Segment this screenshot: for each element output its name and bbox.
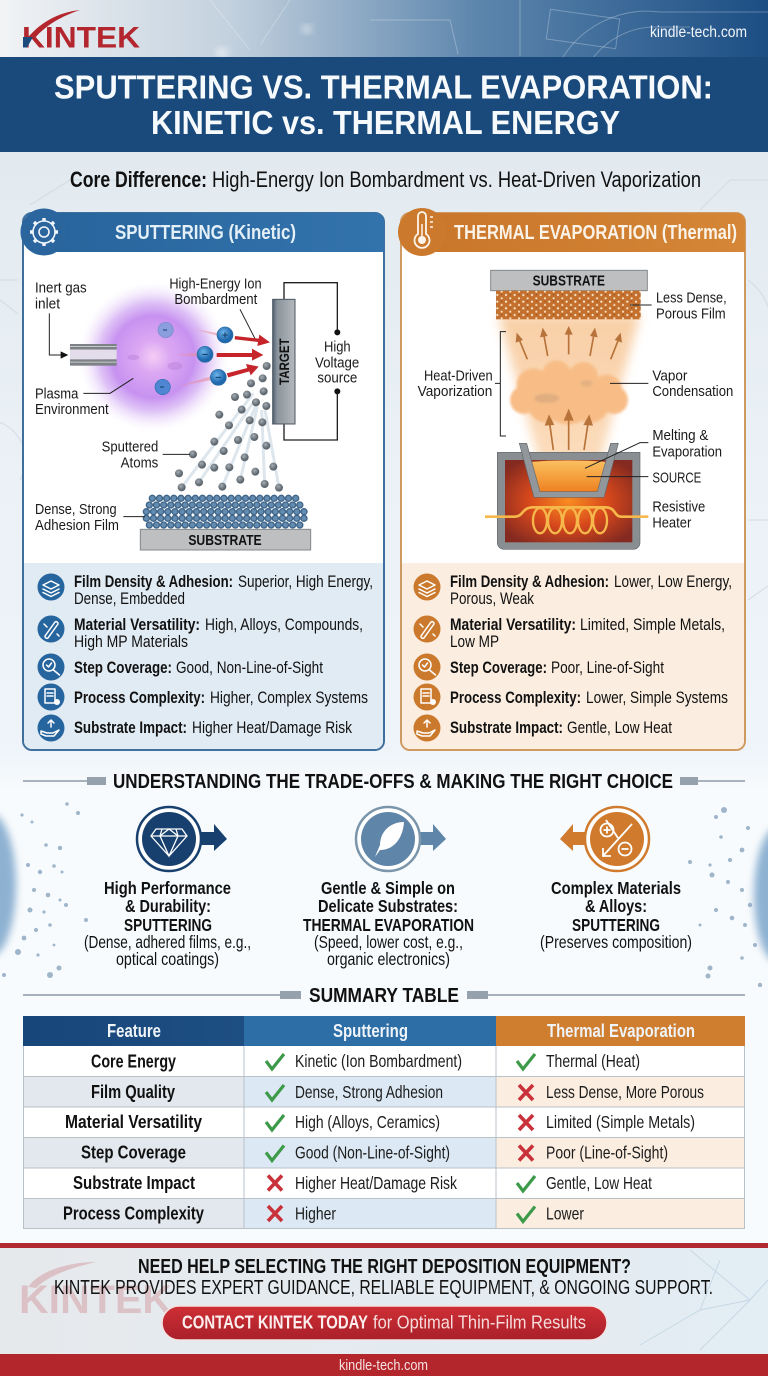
- row: substrate impact: [73, 1172, 652, 1193]
- row: film quality: Less Dense, More Porous: [546, 1082, 704, 1102]
- panel heading: sputtering: SPUTTERING (Kinetic): [115, 222, 296, 244]
- bracket and label: heat-driven vaporization: [418, 332, 506, 436]
- title band: KINETIC vs. THERMAL ENERGY: [151, 104, 620, 141]
- icon: gear: [20, 208, 68, 256]
- title band: [0, 57, 768, 152]
- target: TARGET: [276, 338, 292, 385]
- contact button: [162, 1306, 607, 1340]
- icon: feather with arrow: [356, 807, 446, 871]
- row: step coverage: Step Coverage:: [74, 659, 172, 677]
- label: sputtered atoms: Sputtered: [102, 440, 158, 456]
- dense film: [146, 498, 305, 525]
- substrate: SUBSTRATE: [188, 533, 262, 549]
- vapor cloud: [510, 360, 628, 424]
- power circuit: [284, 283, 340, 440]
- section heading: summary table: SUMMARY TABLE: [309, 984, 459, 1007]
- inlet arrow: [49, 313, 68, 359]
- vapor haze: [498, 315, 640, 463]
- choice: high performance: High Performance: [104, 878, 231, 898]
- row: step coverage: Poor, Line-of-Sight: [551, 659, 664, 677]
- contact button: CONTACT KINTEK TODAY: [182, 1312, 369, 1332]
- choice: gentle and simple: THERMAL EVAPORATION: [303, 915, 474, 935]
- choice: gentle and simple: [303, 807, 474, 969]
- row: process complexity: Lower, Simple Systems: [586, 689, 728, 707]
- row: core energy: Core Energy: [91, 1050, 177, 1072]
- choice: complex materials: SPUTTERING: [572, 915, 660, 935]
- row: material versatility: Limited (Simple Metals): [546, 1112, 695, 1132]
- row: film quality: [91, 1081, 704, 1102]
- resistive heater coil: [485, 507, 648, 533]
- logo: KINTEK: [22, 10, 140, 54]
- row: material versatility: High, Alloys, Compounds,: [205, 616, 363, 634]
- choice: complex materials: (Preserves composition): [540, 932, 692, 952]
- row: substrate impact: Substrate Impact:: [74, 719, 187, 737]
- label: high voltage source: Voltage: [315, 355, 359, 371]
- website link top: kindle-tech.com: [650, 24, 747, 41]
- row: film quality: Film Quality: [91, 1081, 176, 1102]
- call to action band: NEED HELP SELECTING THE RIGHT DEPOSITION EQUIPMENT?: [138, 1256, 631, 1278]
- row: material versatility: High (Alloys, Ceramics): [295, 1112, 440, 1132]
- row: process complexity: Higher: [295, 1204, 336, 1224]
- row: process complexity: [63, 1202, 584, 1224]
- table header: Feature: [107, 1021, 161, 1041]
- row: film density: Film Density & Adhesion:: [74, 573, 233, 591]
- panel: thermal evaporation: [398, 208, 745, 750]
- row: process complexity: Process Complexity:: [450, 689, 581, 707]
- label: sputtered atoms: [102, 440, 190, 471]
- label: high-energy ion bombardment: Bombardment: [174, 292, 257, 308]
- row: substrate impact: Substrate Impact:: [450, 719, 563, 737]
- row: film quality: Dense, Strong Adhesion: [295, 1082, 443, 1102]
- sputtered atoms: [175, 362, 283, 492]
- row: substrate impact: Gentle, Low Heat: [567, 719, 672, 737]
- row: process complexity: Process Complexity: [63, 1202, 205, 1224]
- row: film density: Dense, Embedded: [74, 590, 185, 608]
- label: source: SOURCE: [652, 470, 701, 486]
- bracket and label: heat-driven vaporization: Heat-Driven: [424, 369, 493, 385]
- icon: thermometer: [398, 208, 446, 256]
- decorative blue mist left: [0, 802, 88, 978]
- footer bar: kindle-tech.com: [339, 1357, 428, 1374]
- label: high voltage source: High: [324, 340, 351, 356]
- row: material versatility: Low MP: [450, 633, 499, 651]
- row: substrate impact: Gentle, Low Heat: [546, 1173, 652, 1193]
- row: step coverage: Step Coverage: [81, 1142, 186, 1162]
- upper vapor arrows: [516, 326, 622, 359]
- bracket and label: heat-driven vaporization: Vaporization: [418, 384, 492, 400]
- label: high voltage source: [315, 340, 359, 387]
- choice: gentle and simple: (Speed, lower cost, e.g.,: [314, 932, 463, 952]
- ions: [155, 322, 233, 395]
- label: less dense porous film: Less Dense,: [656, 291, 727, 307]
- sputtered atom trails: [182, 393, 279, 488]
- title band: SPUTTERING VS. THERMAL EVAPORATION:: [54, 68, 713, 106]
- label: high-energy ion bombardment: High-Energy Ion: [169, 276, 262, 292]
- crucible: [519, 443, 618, 497]
- row: step coverage: Poor (Line-of-Sight): [546, 1142, 668, 1162]
- choice: gentle and simple: organic electronics): [327, 949, 450, 969]
- label: source: [587, 470, 701, 486]
- section heading: trade-offs: UNDERSTANDING THE TRADE-OFFS & MAKING THE RIGHT CHOICE: [113, 770, 673, 793]
- label: plasma environment: Plasma: [35, 386, 79, 402]
- label: melting and evaporation: [585, 428, 722, 468]
- row: material versatility: Material Versatility:: [74, 616, 200, 634]
- summary table: [23, 1016, 745, 1229]
- label: melting and evaporation: Melting &: [652, 428, 709, 444]
- substrate: [491, 270, 647, 291]
- target: [273, 299, 295, 424]
- choice: gentle and simple: Delicate Substrates:: [318, 896, 458, 916]
- row: material versatility: High MP Materials: [74, 633, 188, 651]
- table header: [23, 1016, 745, 1046]
- row: step coverage: [38, 654, 323, 680]
- row: film density: [414, 573, 732, 608]
- footer bar: [0, 1354, 768, 1376]
- row: step coverage: [414, 654, 664, 680]
- row: process complexity: Higher, Complex Systems: [210, 689, 368, 707]
- heater body: [497, 452, 640, 549]
- molten source: [528, 460, 608, 492]
- choice: high performance: SPUTTERING: [124, 915, 212, 935]
- call to action band: [0, 1243, 768, 1354]
- plasma cloud: [78, 282, 228, 432]
- label: sputtered atoms: Atoms: [121, 455, 158, 471]
- label: less dense porous film: [630, 291, 727, 322]
- label: inert gas inlet: [35, 281, 87, 312]
- choice: high performance: [84, 807, 251, 969]
- diagram: thermal evaporation process: [418, 270, 733, 549]
- label: high voltage source: source: [317, 371, 357, 387]
- table shading: [23, 1046, 745, 1229]
- choice: complex materials: & Alloys:: [585, 896, 647, 916]
- row: substrate impact: Higher Heat/Damage Risk: [192, 719, 353, 737]
- lower vapor arrows: [545, 409, 593, 450]
- ion trails and red arrows: [177, 329, 270, 386]
- row: step coverage: Good, Non-Line-of-Sight: [176, 659, 323, 677]
- choice: high performance: & Durability:: [125, 896, 211, 916]
- comparison list: thermal evaporation: [414, 573, 732, 742]
- table header: Sputtering: [333, 1021, 408, 1041]
- choice: complex materials: [540, 807, 692, 952]
- comparison list: sputtering: [38, 573, 373, 742]
- icon: plus minus with arrow: [560, 807, 649, 871]
- row: material versatility: [38, 616, 363, 651]
- row: step coverage: [81, 1142, 668, 1162]
- row: process complexity: Process Complexity:: [74, 689, 205, 707]
- row: substrate impact: Higher Heat/Damage Risk: [295, 1173, 457, 1193]
- label: plasma environment: [35, 378, 133, 418]
- top header strip: [0, 0, 768, 62]
- label: inert gas inlet: inlet: [35, 296, 60, 312]
- diagram: sputtering process: [35, 276, 359, 550]
- label: dense strong adhesion film: Dense, Strong: [35, 502, 117, 518]
- label: plasma environment: Environment: [35, 402, 109, 418]
- row: core energy: Thermal (Heat): [546, 1051, 640, 1071]
- porous film: [496, 291, 641, 319]
- row: core energy: Kinetic (Ion Bombardment): [295, 1051, 462, 1071]
- row: material versatility: Material Versatility: [65, 1111, 203, 1132]
- row: film density: Film Density & Adhesion:: [450, 573, 609, 591]
- logo: KINTEK: KINTEK: [22, 22, 140, 54]
- row: film density: [38, 573, 373, 608]
- label: resistive heater: Heater: [652, 515, 691, 531]
- table header: Thermal Evaporation: [547, 1021, 695, 1041]
- row: substrate impact: [38, 714, 353, 742]
- watermark logo: KINTEK: [19, 1278, 172, 1322]
- row: film density: Superior, High Energy,: [238, 573, 373, 591]
- substrate: SUBSTRATE: [533, 274, 605, 290]
- choice: high performance: optical coatings): [116, 949, 219, 969]
- row: process complexity: Lower: [546, 1204, 584, 1224]
- substrate: [140, 529, 311, 550]
- choice: high performance: (Dense, adhered films, e.g.,: [84, 932, 251, 952]
- choice: complex materials: Complex Materials: [551, 878, 681, 898]
- row: material versatility: Limited, Simple Metals,: [580, 616, 725, 634]
- core difference line: Core Difference:: [70, 167, 207, 192]
- row: core energy: [91, 1050, 640, 1072]
- row: process complexity: [414, 684, 728, 710]
- row: substrate impact: [414, 714, 672, 742]
- label: high-energy ion bombardment: [169, 276, 262, 339]
- label: dense strong adhesion film: [35, 502, 145, 534]
- label: resistive heater: Resistive: [652, 500, 705, 516]
- label: dense strong adhesion film: Adhesion Film: [35, 518, 119, 534]
- label: inert gas inlet: Inert gas: [35, 281, 87, 297]
- row: film density: Porous, Weak: [450, 590, 535, 608]
- gas inlet pipe: [70, 344, 117, 366]
- label: less dense porous film: Porous Film: [656, 306, 726, 322]
- contact button: for Optimal Thin-Film Results: [373, 1312, 586, 1332]
- row: material versatility: [414, 616, 725, 651]
- label: vapor condensation: [610, 369, 733, 400]
- row: film density: Lower, Low Energy,: [614, 573, 732, 591]
- section heading: summary table: [23, 984, 745, 1007]
- label: vapor condensation: Condensation: [652, 384, 733, 400]
- decorative blue mist right: [688, 807, 768, 987]
- label: vapor condensation: Vapor: [652, 369, 687, 385]
- choice: gentle and simple: Gentle & Simple on: [321, 878, 455, 898]
- row: material versatility: Material Versatility:: [450, 616, 576, 634]
- row: step coverage: Step Coverage:: [450, 659, 547, 677]
- row: step coverage: Good (Non-Line-of-Sight): [295, 1142, 450, 1162]
- row: substrate impact: Substrate Impact: [73, 1172, 195, 1193]
- label: melting and evaporation: Evaporation: [652, 445, 722, 461]
- icon: diamond with arrow: [137, 807, 227, 871]
- row: material versatility: [65, 1111, 695, 1132]
- panel: sputtering: [20, 208, 384, 750]
- label: resistive heater: [652, 500, 705, 531]
- row: process complexity: [38, 684, 368, 710]
